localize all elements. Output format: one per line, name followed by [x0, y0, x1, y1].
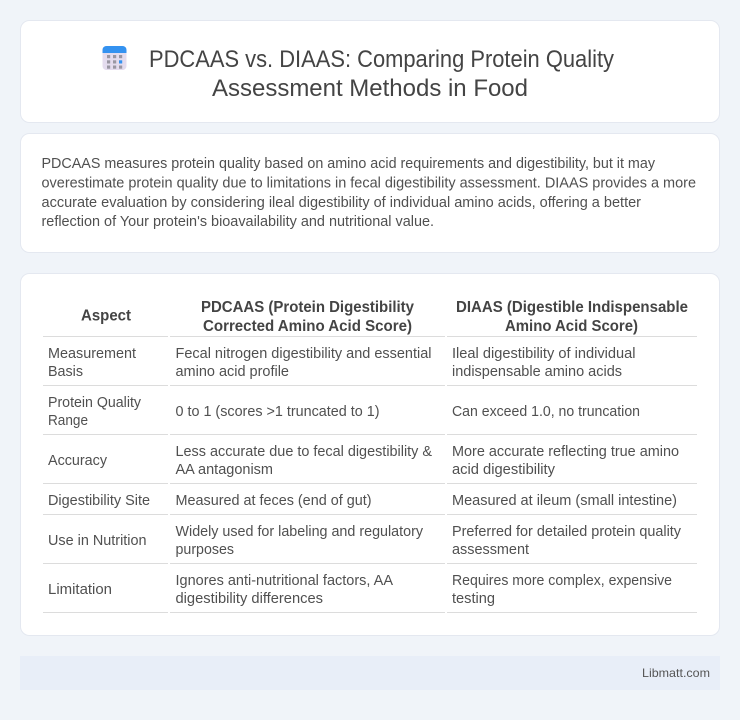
row: accuracy: Less accurate due to fecal digestibility & [176, 444, 432, 460]
row: measurement basis: Ileal digestibility of individual [452, 346, 636, 362]
row: limitation: Limitation [48, 582, 112, 598]
table header row: Aspect [81, 308, 131, 324]
row: digestibility site [43, 493, 697, 514]
row: digestibility site: Digestibility Site [48, 493, 150, 509]
summary text block: PDCAAS measures protein quality based on amino acid requirements and digestibility, but it may [42, 156, 656, 172]
footer [20, 656, 720, 690]
row: limitation: Ignores anti-nutritional factors, AA [176, 573, 393, 589]
summary text block: overestimate protein quality due to limitations in fecal digestibility assessment. DIAAS provides a more [42, 176, 696, 192]
row: protein quality range: Can exceed 1.0, no truncation [452, 404, 640, 420]
panel: comparison table [20, 274, 720, 636]
title [149, 46, 614, 102]
row: use in nutrition: Use in Nutrition [48, 533, 146, 549]
row: digestibility site: Measured at ileum (small intestine) [452, 493, 677, 509]
table header row: Corrected Amino Acid Score) [203, 318, 412, 335]
row: accuracy [43, 444, 697, 484]
row: limitation: Requires more complex, expensive [452, 573, 672, 589]
icon: calendar [102, 46, 126, 70]
row: measurement basis: Fecal nitrogen digestibility and essential [176, 346, 432, 362]
row: measurement basis: indispensable amino acids [452, 364, 622, 380]
row: measurement basis [43, 346, 697, 386]
row: protein quality range [43, 395, 697, 434]
row: accuracy: AA antagonism [176, 462, 273, 478]
row: measurement basis: Measurement [48, 346, 136, 362]
row: measurement basis: Basis [48, 364, 83, 380]
row: use in nutrition [43, 524, 697, 564]
footer: Libmatt.com [642, 666, 710, 680]
row: accuracy: acid digestibility [452, 462, 556, 478]
table header row: PDCAAS (Protein Digestibility [201, 299, 414, 316]
row: accuracy: More accurate reflecting true amino [452, 444, 679, 460]
title: Assessment Methods in Food [212, 75, 528, 102]
title: PDCAAS vs. DIAAS: Comparing Protein Quality [149, 46, 614, 73]
summary text block: accurate evaluation by considering ileal digestibility of individual amino acids, offering a better [42, 195, 641, 211]
row: limitation: digestibility differences [176, 591, 323, 607]
row: use in nutrition: Widely used for labeling and regulatory [176, 524, 424, 540]
row: protein quality range: Protein Quality [48, 395, 142, 411]
table header row: DIAAS (Digestible Indispensable [456, 299, 688, 316]
row: use in nutrition: Preferred for detailed protein quality [452, 524, 682, 540]
row: accuracy: Accuracy [48, 453, 108, 469]
row: use in nutrition: assessment [452, 542, 529, 558]
panel: summary [20, 134, 720, 252]
table header row [43, 299, 697, 336]
summary text block: reflection of Your protein's bioavailability and nutritional value. [42, 214, 434, 230]
row: protein quality range: Range [48, 413, 88, 429]
panel: header [20, 20, 720, 122]
row: limitation: testing [452, 591, 495, 607]
row: measurement basis: amino acid profile [176, 364, 289, 380]
table header row: Amino Acid Score) [505, 318, 638, 335]
row: use in nutrition: purposes [176, 542, 234, 558]
row: digestibility site: Measured at feces (end of gut) [176, 493, 372, 509]
row: limitation [43, 573, 697, 612]
summary text block [42, 156, 696, 230]
row: protein quality range: 0 to 1 (scores >1 truncated to 1) [176, 404, 380, 420]
